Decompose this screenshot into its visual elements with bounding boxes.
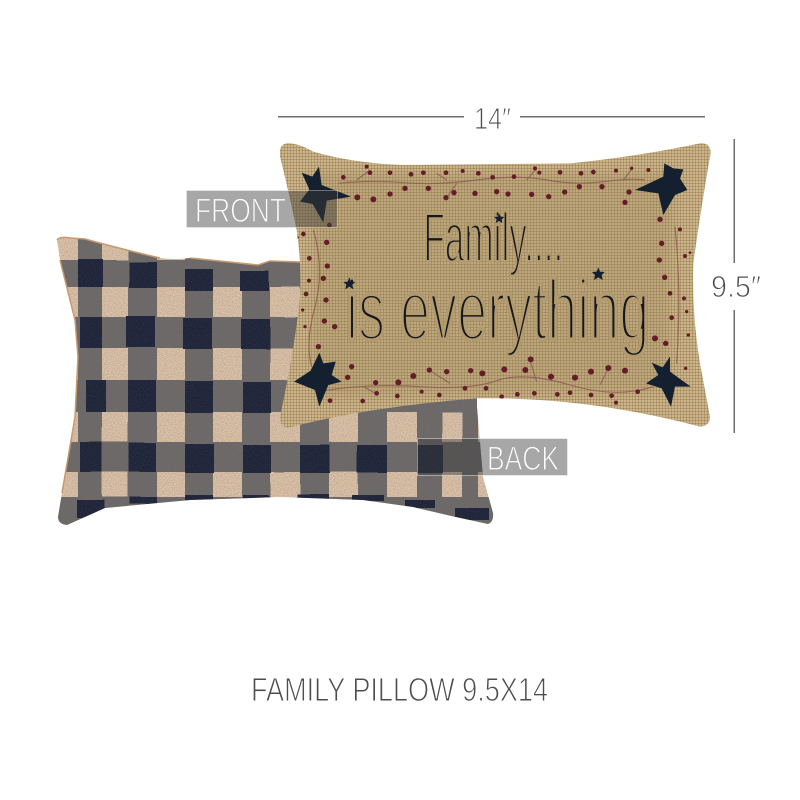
dimension: height 9.5 inches: 9.5″ xyxy=(711,269,761,304)
navy stars xyxy=(294,163,691,407)
label: front: FRONT xyxy=(195,192,286,230)
red berries xyxy=(295,165,691,405)
back pillow xyxy=(50,230,500,537)
label: back xyxy=(418,438,568,478)
vines xyxy=(309,168,679,394)
dimension: width 14 inches: 14″ xyxy=(474,101,511,136)
label: back: BACK xyxy=(487,440,559,478)
gingham fabric xyxy=(50,230,500,537)
stitched words xyxy=(346,199,649,358)
back pillow piping xyxy=(57,237,300,493)
stitched words: Family.... xyxy=(423,199,563,277)
caption: FAMILY PILLOW 9.5X14 xyxy=(251,671,548,708)
front pillow xyxy=(280,143,711,428)
